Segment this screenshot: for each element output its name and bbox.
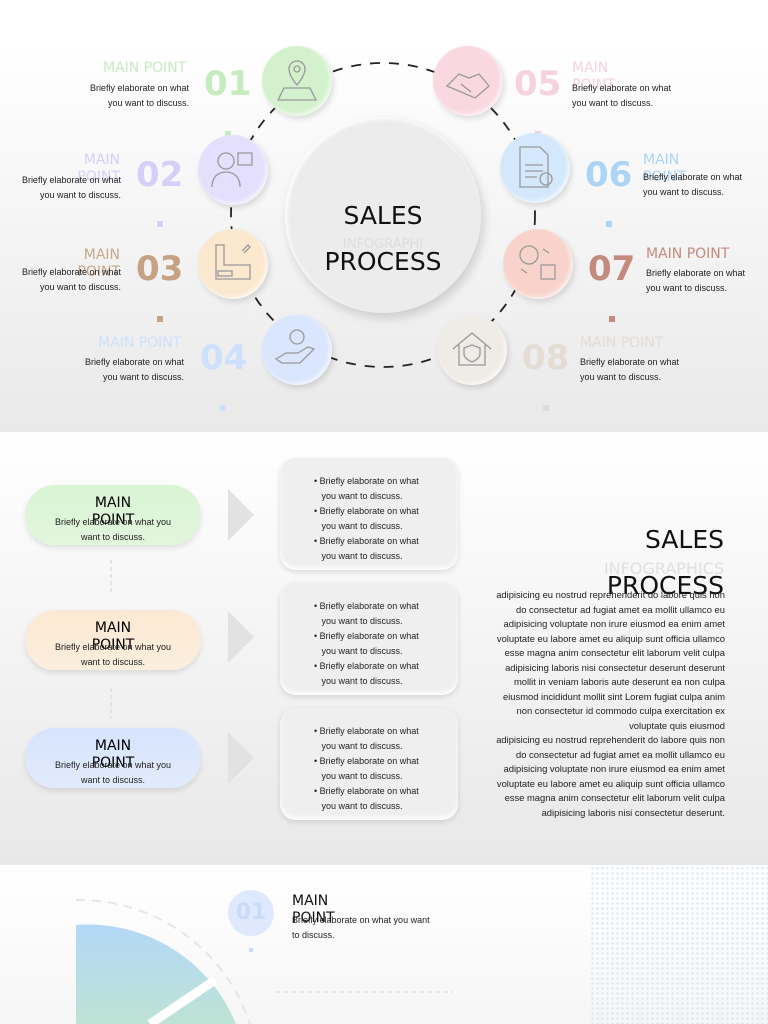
step 01: 01 (204, 64, 251, 104)
step 08: MAIN POINT (580, 335, 663, 351)
step 02: Briefly elaborate on what you want to discuss. (22, 175, 121, 200)
step 02: MAIN POINT (77, 152, 120, 185)
box 2: you want to discuss. (322, 676, 403, 686)
step 04 (85, 335, 247, 411)
point 01: Briefly elaborate on what you want to discuss. (292, 915, 430, 940)
body text (496, 589, 725, 818)
box 2 (280, 583, 458, 695)
center circle (285, 117, 481, 313)
point 01: POINT (292, 910, 335, 926)
box 3: • Briefly elaborate on what (314, 786, 419, 796)
box 1 (280, 458, 458, 570)
box 3: • Briefly elaborate on what (314, 726, 419, 736)
connectors (110, 560, 112, 718)
pill 2: POINT (92, 637, 134, 653)
step 07 (588, 246, 745, 322)
box 1: • Briefly elaborate on what (314, 476, 419, 486)
pill 2 (25, 610, 201, 670)
dashed ring (230, 62, 536, 368)
box 2: you want to discuss. (322, 616, 403, 626)
pill 3: POINT (92, 755, 134, 771)
box 2: • Briefly elaborate on what (314, 661, 419, 671)
point 01 (228, 890, 430, 952)
box 1: you want to discuss. (322, 551, 403, 561)
dot pattern (590, 866, 768, 1024)
icon 05 (433, 46, 503, 116)
body text: adipisicing eu nostrud reprehenderit do labore quis non do consectetur ad fugiat amet ea mollit ullamco eu adipisicing voluptate non irure eiusmod ea enim amet voluptate eu labore amet eu aliquip sunt officia ullamco esse magna anim consectetur elit laborum velit culpa adipisicing laboris nisi consectetur deserunt. (496, 734, 725, 818)
step 08: 08 (522, 338, 569, 378)
step 07: 07 (588, 249, 635, 289)
section 2 background (0, 432, 768, 865)
icon 02 (198, 135, 268, 205)
pill 3 (25, 728, 201, 788)
pill 1: want to discuss. (81, 532, 145, 542)
box 1: • Briefly elaborate on what (314, 536, 419, 546)
center circle: INFOGRAPHI (343, 237, 423, 252)
icon 04 (262, 315, 332, 385)
step 01 (90, 60, 251, 136)
pie chart (76, 899, 251, 1024)
pill 2: Briefly elaborate on what you (55, 642, 171, 652)
step 03 (22, 247, 183, 322)
step 01: MAIN POINT (103, 60, 186, 76)
step 02: 02 (136, 155, 183, 195)
title 2: PROCESS (607, 571, 724, 600)
box 3: you want to discuss. (322, 771, 403, 781)
box 3: • Briefly elaborate on what (314, 756, 419, 766)
step 03: MAIN POINT (77, 247, 120, 280)
step 03: Briefly elaborate on what you want to discuss. (22, 267, 121, 292)
chevron 1 (228, 489, 254, 541)
box 1: you want to discuss. (322, 521, 403, 531)
box 3: you want to discuss. (322, 741, 403, 751)
pill 3: Briefly elaborate on what you (55, 760, 171, 770)
pill 1: MAIN (95, 495, 131, 511)
box 1: • Briefly elaborate on what (314, 506, 419, 516)
step 01: Briefly elaborate on what you want to discuss. (90, 83, 189, 108)
icon 07 (503, 229, 573, 299)
box 2: • Briefly elaborate on what (314, 601, 419, 611)
chevron 2 (228, 611, 254, 663)
chevron 3 (228, 732, 254, 784)
title 2: INFOGRAPHICS (604, 559, 724, 578)
box 1: you want to discuss. (322, 491, 403, 501)
title 2: SALES (645, 525, 724, 554)
step 04: 04 (200, 338, 247, 378)
box 3: you want to discuss. (322, 801, 403, 811)
pill 3: want to discuss. (81, 774, 145, 784)
step 05 (514, 60, 671, 134)
pill 2: MAIN (95, 620, 131, 636)
point 01: 01 (236, 900, 266, 925)
center circle: SALES (343, 201, 423, 230)
point 01: MAIN (292, 893, 328, 909)
pill 1: Briefly elaborate on what you (55, 517, 171, 527)
step 05: MAIN POINT (572, 60, 615, 93)
step 05: Briefly elaborate on what you want to discuss. (572, 83, 671, 108)
step 06: Briefly elaborate on what you want to discuss. (643, 172, 742, 196)
step 08 (522, 335, 679, 411)
section 1 background (0, 0, 768, 432)
box 2: • Briefly elaborate on what (314, 631, 419, 641)
step 03: 03 (136, 249, 183, 289)
step 04: Briefly elaborate on what you want to discuss. (85, 357, 184, 382)
step 08: Briefly elaborate on what you want to discuss. (580, 357, 679, 382)
box 2: you want to discuss. (322, 646, 403, 656)
icon 03 (198, 229, 268, 299)
step 07: Briefly elaborate on what you want to discuss. (646, 268, 745, 292)
pill 3: MAIN (95, 738, 131, 754)
step 04: MAIN POINT (98, 335, 181, 351)
pill 2: want to discuss. (81, 656, 145, 666)
step 06: MAIN POINT (643, 152, 686, 185)
pill 1 (25, 485, 201, 545)
body text: adipisicing eu nostrud reprehenderit do labore quis non do consectetur ad fugiat amet ea mollit ullamco eu adipisicing voluptate non irure eiusmod ea enim amet voluptate eu labore amet eu aliquip sunt officia ullamco esse magna anim consectetur elit laborum velit culpa adipisicing laboris nisi consectetur deserunt deserunt mollit in veniam laboris aute deserunt ea non culpa eiusmod incididunt mollit sint Lorem fugiat culpa anim non consectetur id commodo culpa exercitation ex voluptate quis eiusmod (496, 589, 725, 730)
step 05: 05 (514, 64, 561, 104)
title 2 (604, 525, 724, 600)
section 3 background (0, 865, 768, 1024)
step 07: MAIN POINT (646, 246, 729, 262)
step 02 (22, 152, 183, 227)
center circle: PROCESS (324, 247, 442, 276)
icon 06 (500, 133, 570, 203)
step 06: 06 (585, 155, 632, 195)
step 06 (585, 152, 742, 227)
icon 08 (437, 315, 507, 385)
icon 01 (262, 46, 332, 116)
pill 1: POINT (92, 512, 134, 528)
box 3 (280, 708, 458, 820)
